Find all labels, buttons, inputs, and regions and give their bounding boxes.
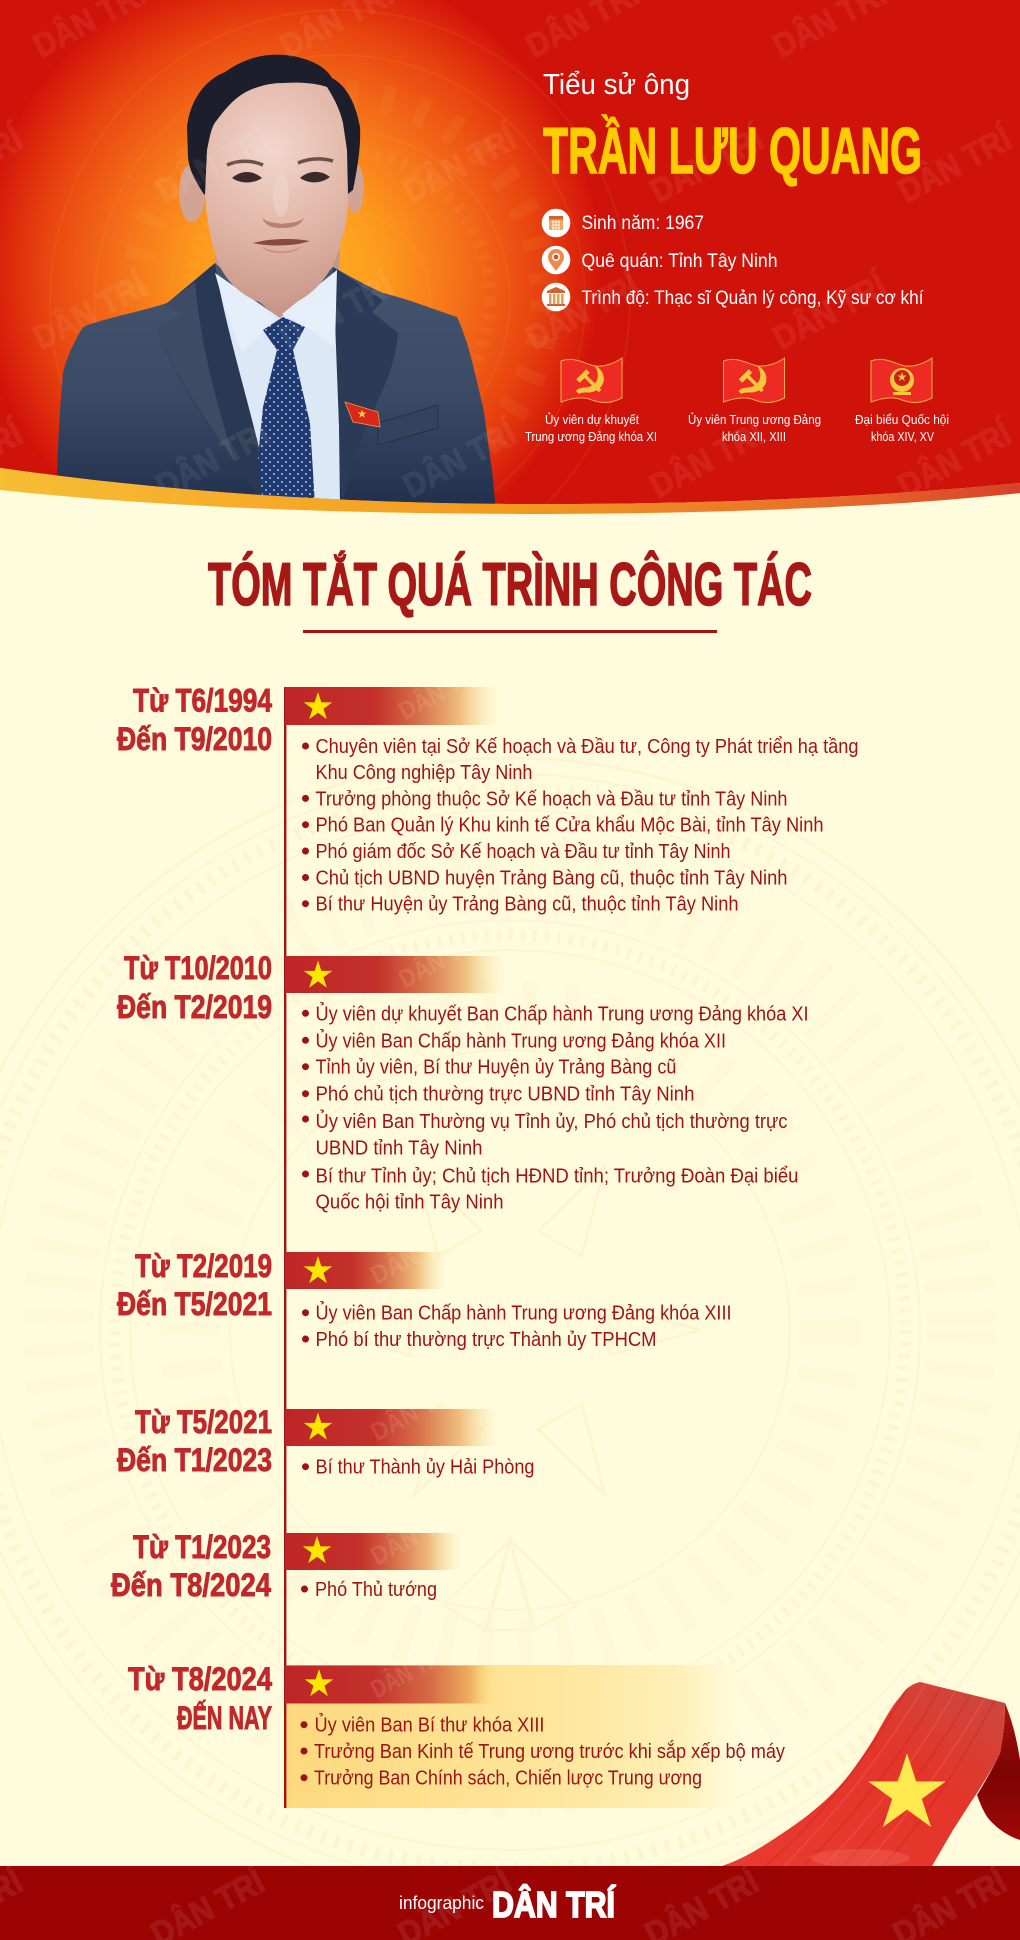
date: ĐẾN NAY: [177, 1700, 272, 1736]
banner with star: [285, 657, 499, 726]
list of positions: Trưởng phòng thuộc Sở Kế hoạch và Đầu tư tỉnh Tây Ninh: [316, 788, 788, 810]
list of positions: Phó bí thư thường trực Thành ủy TPHCM: [316, 1329, 656, 1351]
date: Từ T5/2021: [135, 1404, 272, 1440]
list of positions: Quốc hội tỉnh Tây Ninh: [316, 1192, 504, 1214]
ribbon fold: [977, 1703, 1020, 1840]
facial features: [227, 159, 333, 253]
list of positions: [300, 1713, 785, 1790]
list of positions: Trưởng Ban Chính sách, Chiến lược Trung ương: [314, 1768, 702, 1790]
left lapel: [157, 263, 272, 505]
necktie: [258, 317, 315, 505]
header watermarks: DÂN TRÍ: [150, 414, 277, 506]
header watermarks: DÂN TRÍ: [274, 266, 401, 358]
list of positions: Phó chủ tịch thường trực UBND tỉnh Tây Ninh: [316, 1084, 694, 1106]
jacket: [57, 263, 496, 510]
caption: [855, 413, 949, 444]
header watermarks: DÂN TRÍ: [397, 119, 524, 211]
banner with star: [285, 1512, 462, 1571]
date: [117, 1248, 272, 1322]
footer bar: [0, 1862, 1020, 1940]
text: birth year: Sinh năm: 1967: [582, 213, 704, 234]
date: [117, 683, 272, 757]
list of positions: Khu Công nghiệp Tây Ninh: [316, 762, 532, 784]
list of positions: Bí thư Tỉnh ủy; Chủ tịch HĐND tỉnh; Trưởng Đoàn Đại biểu: [316, 1165, 798, 1187]
header watermarks: DÂN TRÍ: [767, 266, 894, 358]
date: Từ T1/2023: [133, 1529, 271, 1565]
caption: Đại biểu Quốc hội: [855, 413, 949, 427]
list of positions: Phó giám đốc Sở Kế hoạch và Đầu tư tỉnh Tây Ninh: [316, 841, 730, 863]
caption: Trung ương Đảng khóa XI: [525, 430, 657, 444]
list of positions: Chuyên viên tại Sở Kế hoạch và Đầu tư, Công ty Phát triển hạ tầng: [316, 736, 858, 758]
date: Đến T2/2019: [117, 989, 272, 1025]
list of positions: [302, 1301, 732, 1351]
banner with star: DÂN T: [365, 1512, 441, 1571]
list of positions: UBND tỉnh Tây Ninh: [316, 1138, 482, 1160]
heading underline: [303, 630, 717, 633]
title: subtitle: Tiểu sử ông: [543, 69, 690, 101]
icon: location pin: [542, 246, 570, 274]
list of positions: Trưởng Ban Kinh tế Trung ương trước khi sắp xếp bộ máy: [314, 1740, 785, 1763]
date: Từ T2/2019: [135, 1248, 272, 1284]
icon: calendar: [542, 209, 570, 237]
timeline item: T5/2021 to T1/2023: [117, 1388, 534, 1479]
date: Đến T8/2024: [111, 1567, 271, 1603]
header watermarks: DÂN TRÍ: [644, 414, 771, 506]
ribbon star: [868, 1753, 946, 1827]
caption: khóa XII, XIII: [722, 430, 786, 444]
caption: [525, 412, 657, 444]
timeline item: T6/1994 to T9/2010: [117, 657, 858, 916]
info: hometown: [542, 246, 778, 274]
banner with star: [285, 925, 504, 994]
banner with star: DÂN T: [365, 1231, 441, 1290]
right ear: [348, 164, 364, 213]
badge: alternate Central Committee member: [525, 358, 657, 444]
badge: Central Committee member: [688, 358, 821, 444]
banner with star: [285, 1388, 498, 1447]
header watermarks: DÂN TRÍ: [150, 119, 277, 211]
timeline item: T8/2024 to present: [128, 1640, 785, 1790]
date: [111, 1529, 271, 1603]
banner with star: DÂN TRÍ: [393, 657, 488, 726]
badge: National Assembly deputy: [855, 358, 949, 444]
header watermarks: DÂN TRÍ: [27, 266, 154, 358]
text: hometown: Quê quán: Tỉnh Tây Ninh: [582, 251, 778, 272]
icon: institution: [542, 283, 570, 311]
banner with star: DÂN TRÍ: [365, 1640, 451, 1704]
icon: state emblem flag: [871, 358, 932, 402]
footer background: [0, 1866, 1020, 1940]
list of positions: Ủy viên Ban Chấp hành Trung ương Đảng khóa XIII: [316, 1301, 732, 1325]
neck: [215, 250, 340, 325]
header red background: [0, 0, 1020, 504]
last period highlight panel: [286, 1665, 735, 1808]
banner with star: [285, 1640, 495, 1704]
icon: party flag: [724, 358, 784, 402]
banner with star: DÂN T: [365, 1388, 441, 1447]
infographic label: infographic: [399, 1893, 484, 1913]
date: Từ T8/2024: [128, 1661, 272, 1697]
header watermarks: [0, 0, 1019, 506]
date: Từ T6/1994: [133, 683, 272, 719]
left ear: [179, 164, 205, 222]
banner with star: [285, 1231, 446, 1290]
curved golden band: [0, 468, 1020, 514]
ribbon flag decoration: [722, 1682, 1020, 1870]
list of positions: Ủy viên dự khuyết Ban Chấp hành Trung ương Đảng khóa XI: [316, 1001, 808, 1025]
date: Đến T5/2021: [117, 1286, 272, 1322]
jacket pocket: [378, 405, 438, 445]
caption: Ủy viên dự khuyết: [545, 412, 639, 427]
date: Đến T9/2010: [117, 721, 272, 757]
Dân Trí logo: DÂN TRÍ: [492, 1883, 616, 1925]
header watermarks: DÂN TRÍ: [397, 414, 524, 506]
list of positions: Tỉnh ủy viên, Bí thư Huyện ủy Trảng Bàng cũ: [316, 1057, 676, 1079]
list of positions: [302, 1001, 808, 1214]
timeline item: T2/2019 to T5/2021: [117, 1231, 732, 1351]
timeline axis: [284, 687, 286, 1808]
list of positions: Phó Thủ tướng: [315, 1579, 437, 1601]
info: birth year: [542, 209, 704, 237]
hair: [187, 55, 360, 200]
date: [117, 1404, 272, 1478]
right lapel: [333, 267, 398, 505]
header watermarks: DÂN TRÍ: [644, 119, 771, 211]
list of positions: Ủy viên Ban Bí thư khóa XIII: [314, 1713, 544, 1737]
date: [117, 950, 272, 1025]
date: Từ T10/2010: [124, 950, 272, 986]
info: education: [542, 283, 924, 311]
list of positions: [302, 736, 858, 916]
list of positions: Bí thư Huyện ủy Trảng Bàng cũ, thuộc tỉnh Tây Ninh: [316, 894, 738, 916]
list of positions: Chủ tịch UBND huyện Trảng Bàng cũ, thuộc tỉnh Tây Ninh: [316, 868, 788, 890]
ribbon body: [722, 1682, 1005, 1866]
banner with star: DÂN TRÍ: [393, 925, 488, 994]
shirt: [215, 270, 340, 505]
delegate pin: [345, 402, 380, 427]
date: [128, 1661, 272, 1736]
list of positions: Phó Ban Quản lý Khu kinh tế Cửa khẩu Mộc Bài, tỉnh Tây Ninh: [316, 815, 824, 837]
text: education: Trình độ: Thạc sĩ Quản lý công, Kỹ sư cơ khí: [582, 288, 924, 309]
face: [205, 83, 348, 306]
shirt collar: [215, 273, 277, 352]
footer watermarks: [0, 1862, 1014, 1940]
list of positions: Bí thư Thành ủy Hải Phòng: [316, 1457, 534, 1479]
panel: header: [0, 0, 1020, 590]
list of positions: Ủy viên Ban Chấp hành Trung ương Đảng khóa XII: [316, 1028, 726, 1052]
portrait of Trần Lưu Quang: [57, 55, 496, 510]
timeline item: T10/2010 to T2/2019: [117, 925, 808, 1214]
caption: Ủy viên Trung ương Đảng: [688, 412, 821, 427]
timeline item: T1/2023 to T8/2024: [111, 1512, 462, 1603]
date: Đến T1/2023: [117, 1442, 272, 1478]
icon: party flag: [561, 358, 622, 402]
caption: [688, 412, 821, 444]
header watermarks: DÂN TRÍ: [520, 266, 647, 358]
list of positions: Ủy viên Ban Thường vụ Tỉnh ủy, Phó chủ tịch thường trực: [316, 1109, 788, 1133]
caption: khóa XIV, XV: [871, 430, 935, 444]
header orange glow: [0, 0, 590, 504]
